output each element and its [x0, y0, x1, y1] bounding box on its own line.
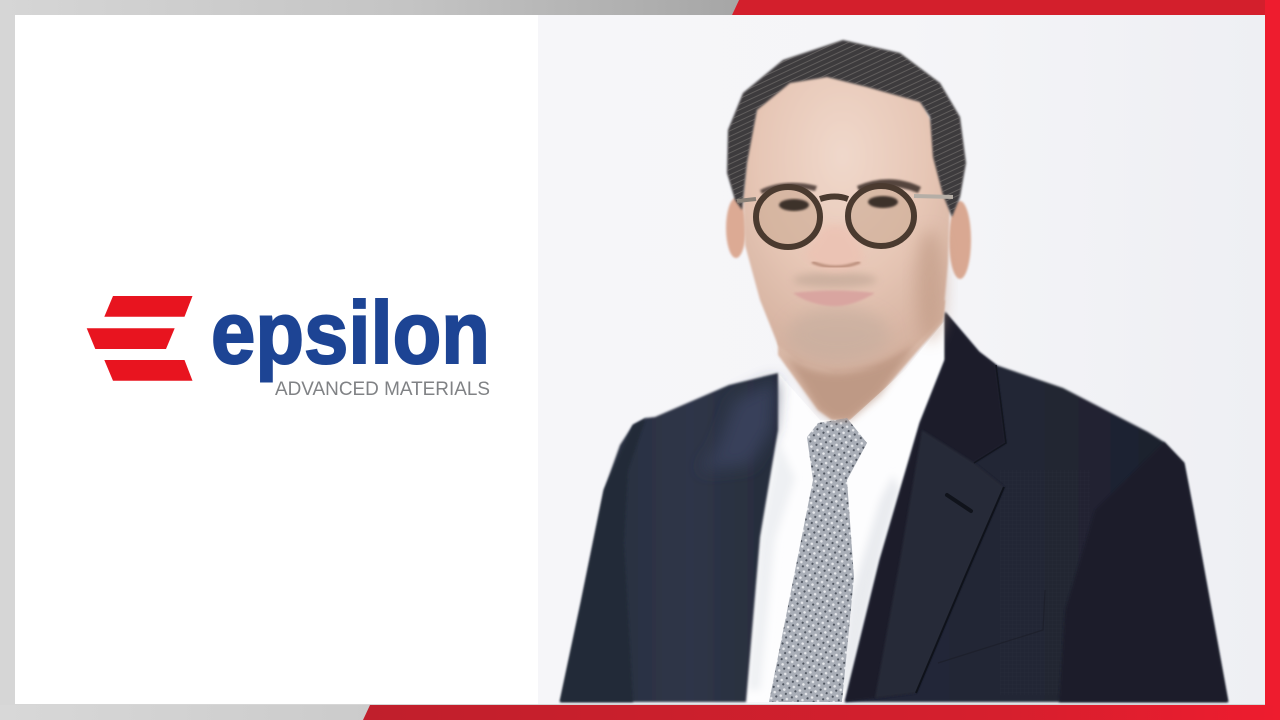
ear left [726, 198, 746, 258]
stubble and cheek shading [786, 307, 890, 363]
chin shadow [785, 345, 915, 420]
right sleeve [1059, 442, 1228, 702]
panel: photo background [538, 15, 1265, 704]
jacket left side [560, 373, 778, 702]
shirt [746, 318, 950, 702]
suit jacket [560, 312, 1228, 702]
chest pocket [938, 590, 1045, 663]
icon: red stripes [87, 296, 192, 381]
nose [805, 225, 864, 272]
tie [769, 418, 867, 702]
ear right [949, 201, 971, 279]
mouth [793, 290, 875, 306]
panel: white logo area [15, 15, 538, 704]
eyes [779, 199, 809, 211]
head [726, 40, 971, 420]
face [743, 72, 950, 372]
glasses [737, 186, 953, 247]
photo: portrait of man in suit [560, 40, 1228, 702]
wordmark: epsilon: epsilon [211, 283, 490, 382]
eyebrows [760, 183, 817, 194]
neck [778, 300, 945, 420]
tagline: advanced materials: ADVANCED MATERIALS [275, 378, 490, 400]
logo: epsilon advanced materials [87, 283, 490, 400]
buttonhole [947, 495, 971, 511]
hair [727, 40, 966, 217]
jacket right side [845, 312, 1228, 702]
left lapel highlight [700, 380, 776, 470]
right lapel [845, 312, 1006, 702]
